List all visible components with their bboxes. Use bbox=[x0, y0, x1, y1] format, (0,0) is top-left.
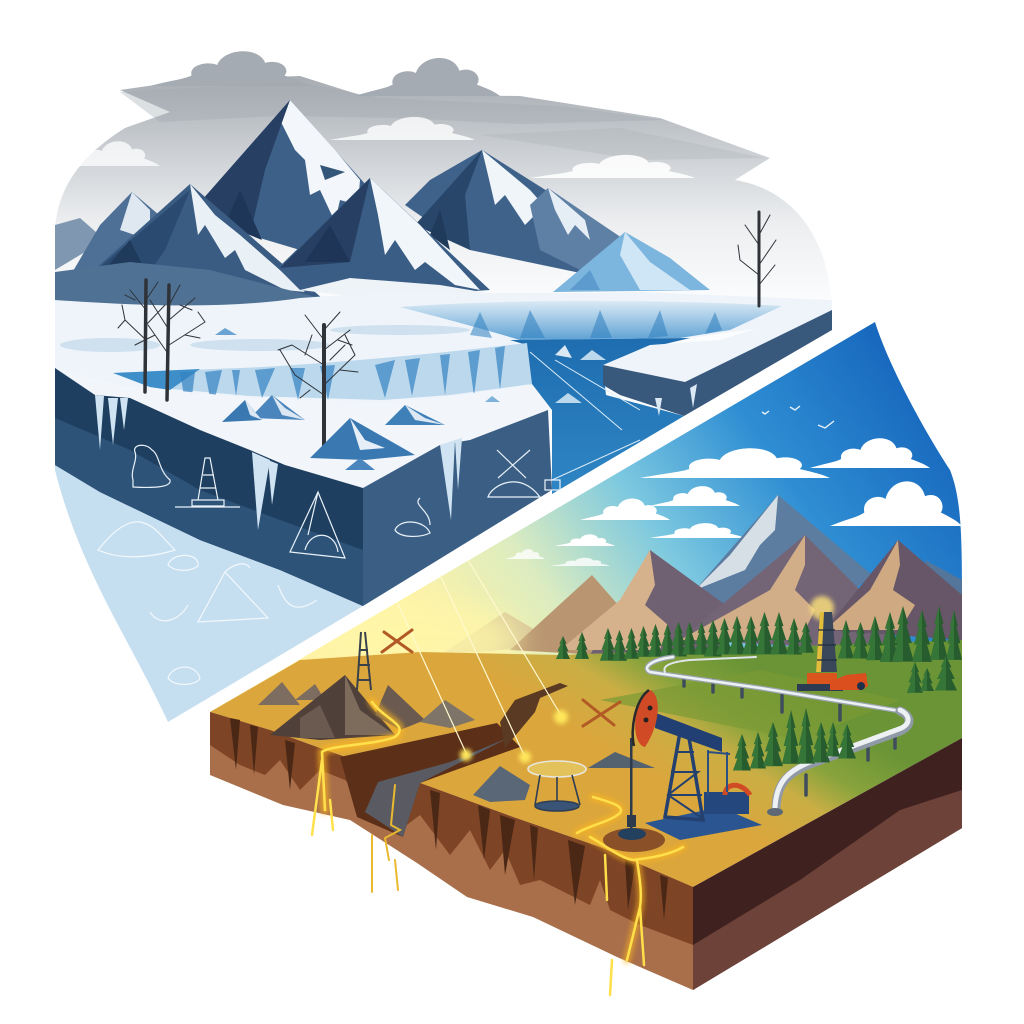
pines by pipeline bbox=[733, 708, 856, 770]
crossed hammers bbox=[382, 630, 620, 726]
white outline icons in rock bbox=[132, 445, 560, 558]
mountain rock pile bbox=[258, 675, 475, 740]
snow field bbox=[55, 292, 832, 488]
snow mountains bbox=[55, 100, 625, 308]
icicles bbox=[95, 395, 462, 530]
pale blue ground below block bbox=[55, 462, 363, 722]
far derrick bbox=[357, 632, 371, 690]
light beams bbox=[397, 560, 562, 757]
glowing beam endpoints bbox=[460, 710, 568, 763]
drilling rig and truck bbox=[797, 596, 868, 691]
crags in cliff bbox=[230, 718, 668, 920]
survey lines over water bbox=[530, 352, 640, 480]
white clouds bbox=[505, 438, 962, 566]
far ice cliff bbox=[400, 301, 782, 340]
bright sky bbox=[210, 322, 962, 712]
land surface bbox=[210, 640, 962, 887]
blue water channel bbox=[510, 338, 690, 494]
right side block bbox=[603, 305, 832, 416]
bare trees bbox=[118, 212, 776, 450]
storm clouds bbox=[60, 51, 765, 178]
front snow shelf bbox=[55, 368, 552, 490]
small ice rocks bbox=[215, 328, 606, 470]
lighter lower rock layer bbox=[55, 418, 363, 606]
fissure canyon bbox=[340, 683, 568, 837]
dark rock block right face bbox=[363, 410, 552, 606]
green shadow bands bbox=[600, 670, 900, 740]
mountains bbox=[440, 495, 962, 655]
upper soil layer with crags bbox=[210, 712, 693, 945]
dark rock block left face bbox=[55, 368, 363, 606]
shadow snow patches bbox=[60, 325, 495, 429]
glow horizon bbox=[327, 602, 532, 653]
gold glow stream right bbox=[577, 797, 683, 995]
grey boulders bbox=[473, 752, 655, 802]
icy sky bbox=[55, 76, 832, 606]
wellhead bbox=[603, 738, 665, 852]
forest row bbox=[556, 606, 962, 693]
panel: resource world bbox=[210, 322, 962, 995]
block right face bbox=[693, 738, 962, 990]
gold glow stream left bbox=[312, 702, 400, 892]
faint sketch icons on pale blue bbox=[98, 522, 317, 684]
birds bbox=[762, 406, 834, 428]
pumpjack bbox=[633, 690, 762, 840]
survey platform bbox=[528, 761, 586, 811]
pipeline bbox=[647, 657, 909, 816]
iceberg bbox=[553, 232, 710, 292]
panel: ice world bbox=[55, 51, 832, 722]
front ice cliff bbox=[113, 343, 532, 400]
block front face bbox=[210, 712, 693, 990]
